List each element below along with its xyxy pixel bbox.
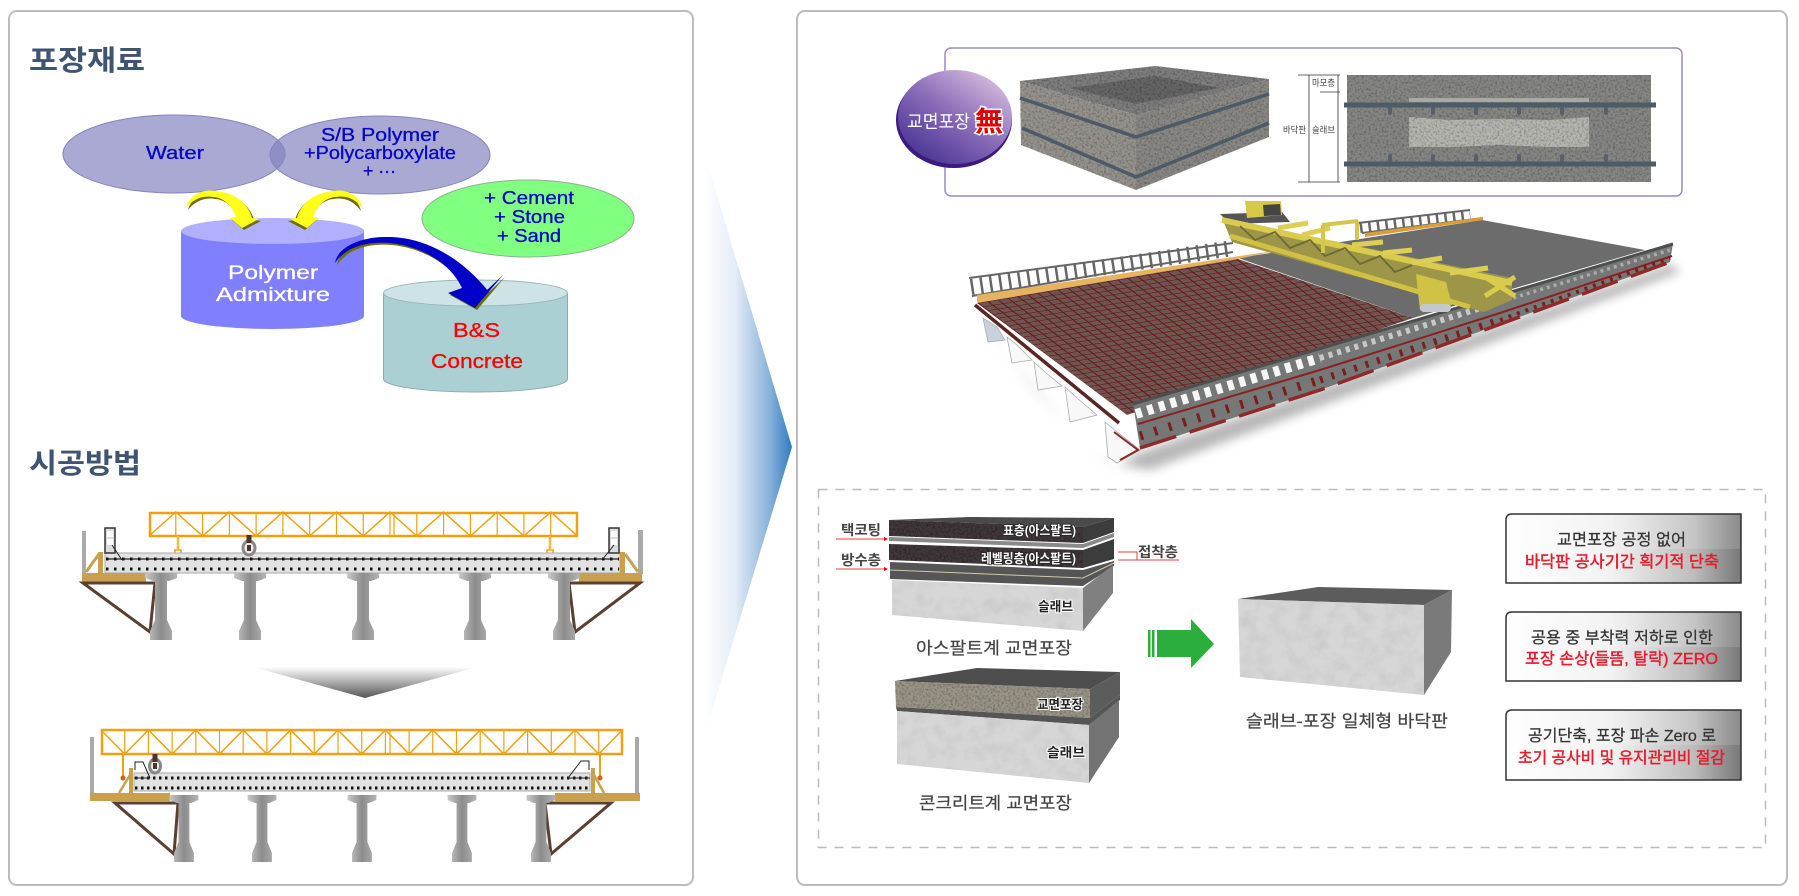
callout box: cost savings: 공기단축, 포장 파손 Zero 로 bbox=[1528, 727, 1716, 745]
cylinder: B&S concrete: Concrete bbox=[431, 351, 523, 373]
arrow: large blue gradient pointer between panels bbox=[705, 155, 792, 734]
arrow: water into admixture bbox=[186, 191, 261, 230]
ellipse: polymer ingredients: +Polycarboxylate bbox=[304, 143, 456, 163]
cylinder: polymer admixture: Admixture bbox=[216, 285, 330, 306]
badge: no deck pavement: 교면포장 bbox=[907, 112, 970, 132]
image: bridge deck under construction bbox=[969, 201, 1680, 475]
cylinder: polymer admixture bbox=[181, 218, 364, 329]
label: asphalt deck pavement: 아스팔트계 교면포장 bbox=[916, 639, 1072, 658]
callout: adhesive layer: 접착층 bbox=[1138, 544, 1178, 560]
rails bbox=[90, 737, 639, 793]
arrow: admixture into concrete bbox=[335, 237, 505, 310]
callout box: shortened schedule: 바닥판 공사기간 획기적 단축 bbox=[1525, 553, 1719, 571]
badge: no deck pavement bbox=[896, 70, 1012, 168]
deck slab bbox=[134, 773, 590, 791]
callout box: shortened schedule bbox=[1506, 514, 1741, 583]
callout: adhesive layer bbox=[1118, 544, 1179, 560]
cylinder: B&S concrete bbox=[384, 280, 568, 392]
callout: waterproof layer bbox=[836, 552, 888, 571]
concrete surface bbox=[1238, 220, 1645, 318]
arrow: green result arrow bbox=[1148, 619, 1214, 668]
truss gantry bbox=[101, 730, 622, 778]
diagram: material mix bbox=[63, 115, 634, 392]
panel: materials and construction method bbox=[9, 11, 693, 885]
arrow: gradient down triangle bbox=[253, 667, 477, 698]
dimension labels: 슬래브 bbox=[1312, 125, 1335, 135]
callout: tack coating bbox=[836, 522, 888, 541]
formwork and supports bbox=[90, 761, 640, 854]
rebar mesh bbox=[975, 259, 1413, 423]
panel: dashed comparison frame bbox=[818, 490, 1766, 848]
front rail bbox=[1133, 243, 1673, 448]
girders bbox=[983, 318, 1140, 463]
dimension labels: 마모층 bbox=[1312, 78, 1335, 88]
panel: bridge deck overview bbox=[797, 11, 1787, 885]
cylinder: polymer admixture: Polymer bbox=[228, 263, 319, 284]
cylinder: B&S concrete: B&S bbox=[453, 320, 500, 342]
paving machine bbox=[1220, 201, 1515, 312]
screed machine bbox=[150, 754, 160, 773]
dimension labels: 바닥판 bbox=[1283, 125, 1306, 135]
heading: construction method: 시공방법 bbox=[29, 448, 141, 479]
layer label: slab: 슬래브 bbox=[1047, 745, 1085, 760]
formwork and supports bbox=[82, 528, 642, 632]
dimension labels bbox=[1283, 75, 1340, 182]
ellipse: water bbox=[63, 115, 285, 193]
screed machine bbox=[243, 535, 255, 555]
ellipse: cement stone sand: + Stone bbox=[494, 207, 565, 227]
ellipse: polymer ingredients bbox=[270, 116, 490, 194]
callout box: zero pavement damage: 포장 손상(들뜸, 탈락) ZERO bbox=[1525, 650, 1718, 668]
callout: tack coating: 택코팅 bbox=[841, 522, 881, 538]
callout box: zero pavement damage bbox=[1506, 612, 1741, 681]
callout: waterproof layer: 방수층 bbox=[841, 552, 881, 568]
label: integrated deck: 슬래브-포장 일체형 바닥판 bbox=[1246, 712, 1448, 731]
image: reinforced slab block bbox=[1020, 66, 1269, 190]
arrow: polymer into admixture bbox=[288, 191, 363, 230]
girders bbox=[170, 795, 555, 862]
girders bbox=[145, 573, 580, 640]
diagram: concrete pavement layers bbox=[895, 668, 1120, 783]
diagram: bridge section after bbox=[90, 730, 640, 862]
truss gantry bbox=[149, 512, 578, 554]
image: slab cross section bbox=[1344, 75, 1656, 182]
ellipse: cement stone sand bbox=[422, 180, 634, 257]
heading: pavement materials: 포장재료 bbox=[29, 45, 145, 76]
image: integrated slab block bbox=[1238, 587, 1452, 695]
ellipse: cement stone sand: + Cement bbox=[484, 188, 574, 208]
ellipse: water: Water bbox=[146, 143, 204, 163]
diagram: asphalt pavement layers bbox=[889, 517, 1114, 631]
layer label: surface course: 표층(아스팔트) bbox=[1003, 523, 1076, 538]
layer label: deck pavement: 교면포장 bbox=[1037, 697, 1083, 712]
layer label: slab: 슬래브 bbox=[1038, 599, 1073, 614]
ellipse: polymer ingredients: + ··· bbox=[363, 161, 396, 181]
back rail bbox=[969, 210, 1483, 296]
shadow bbox=[1120, 264, 1680, 470]
callout box: cost savings bbox=[1506, 710, 1741, 780]
diagram: bridge section before bbox=[82, 512, 643, 640]
rails bbox=[82, 530, 643, 574]
form board bbox=[977, 217, 1483, 303]
panel: no pavement detail box bbox=[945, 48, 1682, 196]
label: concrete deck pavement: 콘크리트계 교면포장 bbox=[919, 794, 1072, 813]
layer label: leveling course: 레벨링층(아스팔트) bbox=[981, 551, 1076, 566]
deck slab bbox=[105, 553, 620, 573]
callout box: shortened schedule: 교면포장 공정 없어 bbox=[1557, 531, 1686, 549]
callout box: zero pavement damage: 공용 중 부착력 저하로 인한 bbox=[1531, 629, 1713, 647]
callout box: cost savings: 초기 공사비 및 유지관리비 절감 bbox=[1518, 749, 1725, 767]
ellipse: polymer ingredients: S/B Polymer bbox=[321, 125, 439, 145]
ellipse: cement stone sand: + Sand bbox=[497, 226, 561, 246]
badge: no deck pavement: 無 bbox=[975, 106, 1003, 137]
